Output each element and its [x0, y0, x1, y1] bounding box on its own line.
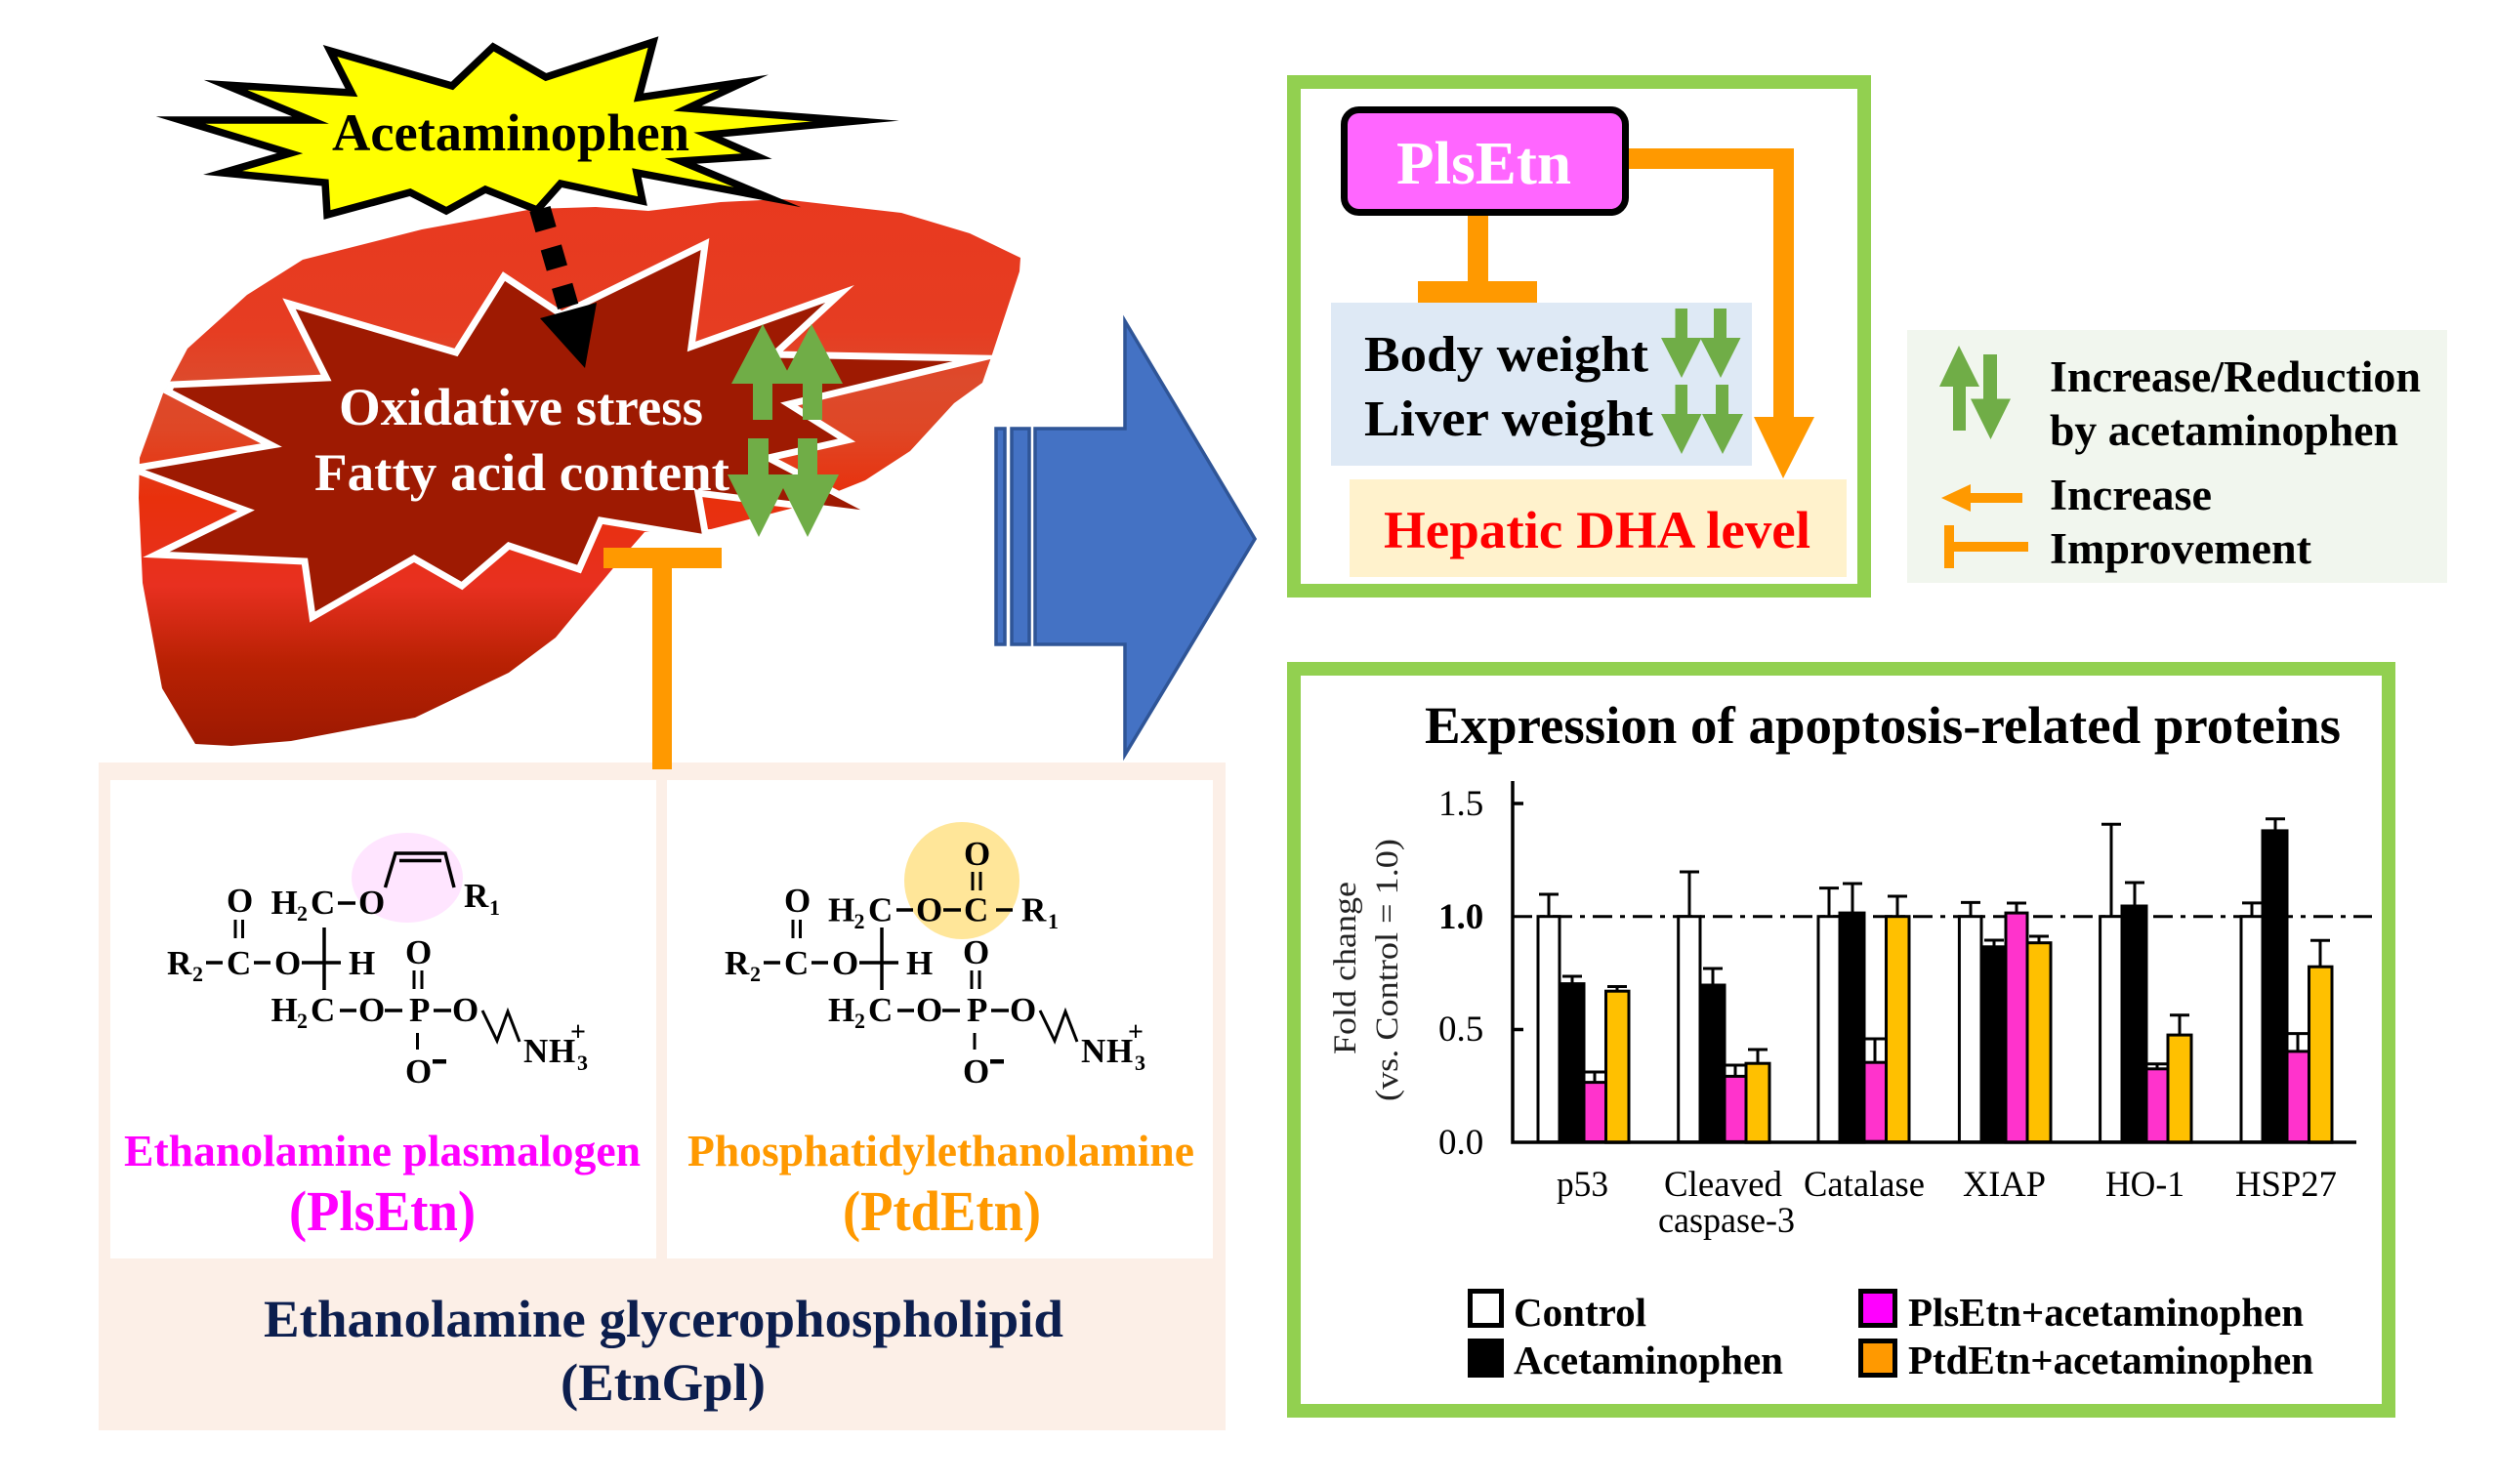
heading: EtnGpl: Ethanolamine glycerophospholipid — [264, 1290, 1063, 1348]
text: oxidative stress: Oxidative stress — [339, 378, 703, 436]
box: body and liver weight — [1331, 303, 1752, 466]
x axis labels: Catalase — [1804, 1165, 1925, 1205]
chemical structure: phosphatidylethanolamine: C — [868, 991, 893, 1029]
chemical structure: phosphatidylethanolamine: O — [963, 1052, 989, 1091]
chemical structure: plasmalogen — [167, 853, 588, 1091]
label: ethanolamine plasmalogen: Ethanolamine plasmalogen — [124, 1126, 641, 1175]
chemical structure: plasmalogen: O — [358, 991, 385, 1029]
chemical structure: plasmalogen: C — [227, 944, 251, 982]
chemical structure: phosphatidylethanolamine: C — [868, 890, 893, 929]
x axis labels: XIAP — [1963, 1165, 2046, 1205]
group: HO-1 — [2101, 824, 2191, 1142]
box: hepatic DHA — [1350, 479, 1847, 577]
y axis labels: 1.0 — [1438, 897, 1483, 937]
x axis labels: Cleaved — [1664, 1165, 1782, 1205]
chemical structure: phosphatidylethanolamine: R — [725, 944, 750, 982]
label: PlsEtn: (PlsEtn) — [289, 1179, 476, 1243]
chemical structure: phosphatidylethanolamine — [725, 835, 1145, 1091]
chemical structure: phosphatidylethanolamine: O — [963, 933, 989, 971]
chemical structure: phosphatidylethanolamine: H — [1106, 1032, 1133, 1070]
icon: improvement bar — [1944, 525, 2028, 568]
text: fatty acid content: Fatty acid content — [314, 443, 729, 502]
bar chart — [1328, 781, 2372, 1241]
chemical structure: phosphatidylethanolamine: R — [1021, 890, 1047, 929]
text: PlsEtn: PlsEtn — [1396, 131, 1571, 197]
chemical structure: plasmalogen: R — [464, 877, 489, 915]
chart legend: Acetaminophen — [1514, 1338, 1783, 1382]
arrow: dotted black arrow — [540, 209, 597, 368]
burst: oxidative stress — [132, 244, 979, 617]
chemical structure: plasmalogen: R — [167, 944, 192, 982]
chemical structure: phosphatidylethanolamine: 2 — [750, 962, 761, 986]
inhibition bar: weights — [1418, 212, 1537, 303]
chemical structure: plasmalogen: C — [311, 884, 335, 922]
chemical structure: phosphatidylethanolamine: N — [1081, 1032, 1105, 1070]
icons: green down arrows — [1661, 309, 1743, 454]
chemical structure: phosphatidylethanolamine: 2 — [854, 1009, 865, 1033]
chemical structure: phosphatidylethanolamine: O — [832, 944, 858, 982]
text: liver weight: Liver weight — [1364, 392, 1654, 447]
panel: legend — [1907, 330, 2447, 583]
panel: PlsEtn effects — [1294, 82, 1864, 591]
chemical structure: phosphatidylethanolamine: P — [967, 991, 987, 1029]
label: phosphatidylethanolamine: Phosphatidylethanolamine — [687, 1126, 1194, 1175]
panel: ethanolamine glycerophospholipid — [99, 763, 1226, 1430]
group: XIAP — [1959, 902, 2051, 1142]
chemical structure: plasmalogen: N — [523, 1032, 548, 1070]
group: catalase — [1818, 884, 1909, 1142]
icon: orange arrow — [1941, 484, 2022, 512]
panel: apoptosis-related proteins — [1294, 669, 2389, 1411]
chemical structure: plasmalogen: O — [358, 884, 385, 922]
chemical structure: phosphatidylethanolamine: + — [1128, 1017, 1144, 1048]
chemical structure: phosphatidylethanolamine: O — [784, 882, 811, 920]
icons: green up arrows — [731, 324, 843, 420]
y axis title: Fold change — [1328, 882, 1363, 1054]
chemical structure: plasmalogen: O — [405, 933, 432, 971]
liver illustration — [139, 199, 1020, 746]
chemical structure: phosphatidylethanolamine: H — [828, 991, 854, 1029]
y axis labels: 0.0 — [1438, 1123, 1483, 1163]
chemical structure: plasmalogen: O — [227, 882, 253, 920]
chemical structure: plasmalogen: H — [549, 1032, 575, 1070]
chart legend — [1468, 1290, 2313, 1382]
chart legend: Control — [1514, 1290, 1646, 1335]
panel: PlsEtn structure — [110, 780, 656, 1258]
label: PtdEtn: (PtdEtn) — [843, 1179, 1041, 1243]
y axis labels — [1438, 784, 1483, 1163]
text: increase/reduction: Increase/Reduction — [2050, 352, 2421, 401]
arrow: increase to DHA — [1626, 148, 1814, 478]
y axis title — [1328, 839, 1405, 1101]
chemical structure: phosphatidylethanolamine: O — [964, 835, 990, 873]
chemical structure: plasmalogen: O — [405, 1052, 432, 1091]
burst: acetaminophen — [181, 42, 855, 215]
y axis labels: 1.5 — [1438, 784, 1483, 824]
x axis labels — [1557, 1165, 2337, 1241]
chemical structure: plasmalogen: O — [274, 944, 301, 982]
highlight: acyl ester — [904, 822, 1019, 939]
highlight: vinyl ether — [352, 833, 463, 923]
chemical structure: plasmalogen: H — [271, 991, 298, 1029]
chemical structure: plasmalogen: C — [311, 991, 335, 1029]
x axis labels: HO-1 — [2105, 1165, 2184, 1205]
icons: green down arrows — [728, 438, 839, 537]
axes — [1513, 781, 2356, 1142]
inhibition bar: PE to liver — [603, 548, 722, 769]
chemical structure: plasmalogen: + — [570, 1017, 586, 1048]
x axis labels: p53 — [1557, 1165, 1608, 1205]
chemical structure: phosphatidylethanolamine: 2 — [853, 909, 865, 933]
y axis title: (vs. Control = 1.0) — [1370, 839, 1405, 1101]
chemical structure: plasmalogen: H — [349, 944, 375, 982]
text: increase: Increase — [2050, 471, 2212, 519]
text: by acetaminophen: by acetaminophen — [2050, 406, 2398, 455]
chemical structure: phosphatidylethanolamine: C — [964, 890, 988, 929]
chemical structure: phosphatidylethanolamine: 3 — [1135, 1051, 1145, 1075]
chemical structure: plasmalogen: P — [409, 991, 430, 1029]
arrow: big blue block arrow — [996, 321, 1255, 755]
text: acetaminophen: Acetaminophen — [332, 103, 689, 162]
group: HSP27 — [2241, 819, 2332, 1142]
chemical structure: phosphatidylethanolamine: H — [906, 944, 933, 982]
chemical structure: phosphatidylethanolamine: O — [916, 991, 942, 1029]
chemical structure: plasmalogen: O — [452, 991, 478, 1029]
chart legend: PlsEtn+acetaminophen — [1908, 1290, 2304, 1335]
chemical structure: plasmalogen: 2 — [297, 901, 308, 926]
chemical structure: phosphatidylethanolamine: O — [1010, 991, 1036, 1029]
group: cleaved caspase-3 — [1679, 872, 1769, 1142]
icon: up and down arrows — [1939, 346, 2011, 439]
heading: EtnGpl abbreviation: (EtnGpl) — [561, 1353, 766, 1412]
text: improvement: Improvement — [2050, 524, 2311, 573]
chemical structure: phosphatidylethanolamine: H — [828, 890, 854, 929]
text: hepatic DHA level: Hepatic DHA level — [1384, 501, 1810, 559]
chemical structure: plasmalogen: 2 — [192, 962, 203, 986]
chemical structure: phosphatidylethanolamine: C — [784, 944, 809, 982]
chemical structure: plasmalogen: 1 — [489, 895, 500, 920]
chemical structure: plasmalogen: 3 — [577, 1051, 588, 1075]
heading: chart title: Expression of apoptosis-related proteins — [1425, 696, 2341, 755]
group: p53 — [1538, 894, 1629, 1142]
chemical structure: phosphatidylethanolamine: 1 — [1048, 909, 1059, 933]
chemical structure: phosphatidylethanolamine: O — [916, 890, 942, 929]
y axis labels: 0.5 — [1438, 1010, 1483, 1050]
x axis labels: caspase-3 — [1658, 1201, 1795, 1241]
chemical structure: plasmalogen: H — [271, 884, 298, 922]
panel: PtdEtn structure — [667, 780, 1213, 1258]
text: body weight: Body weight — [1364, 327, 1649, 383]
chart legend: PtdEtn+acetaminophen — [1908, 1338, 2313, 1382]
chemical structure: plasmalogen: 2 — [297, 1009, 308, 1033]
x axis labels: HSP27 — [2235, 1165, 2337, 1205]
box: PlsEtn — [1344, 109, 1625, 213]
